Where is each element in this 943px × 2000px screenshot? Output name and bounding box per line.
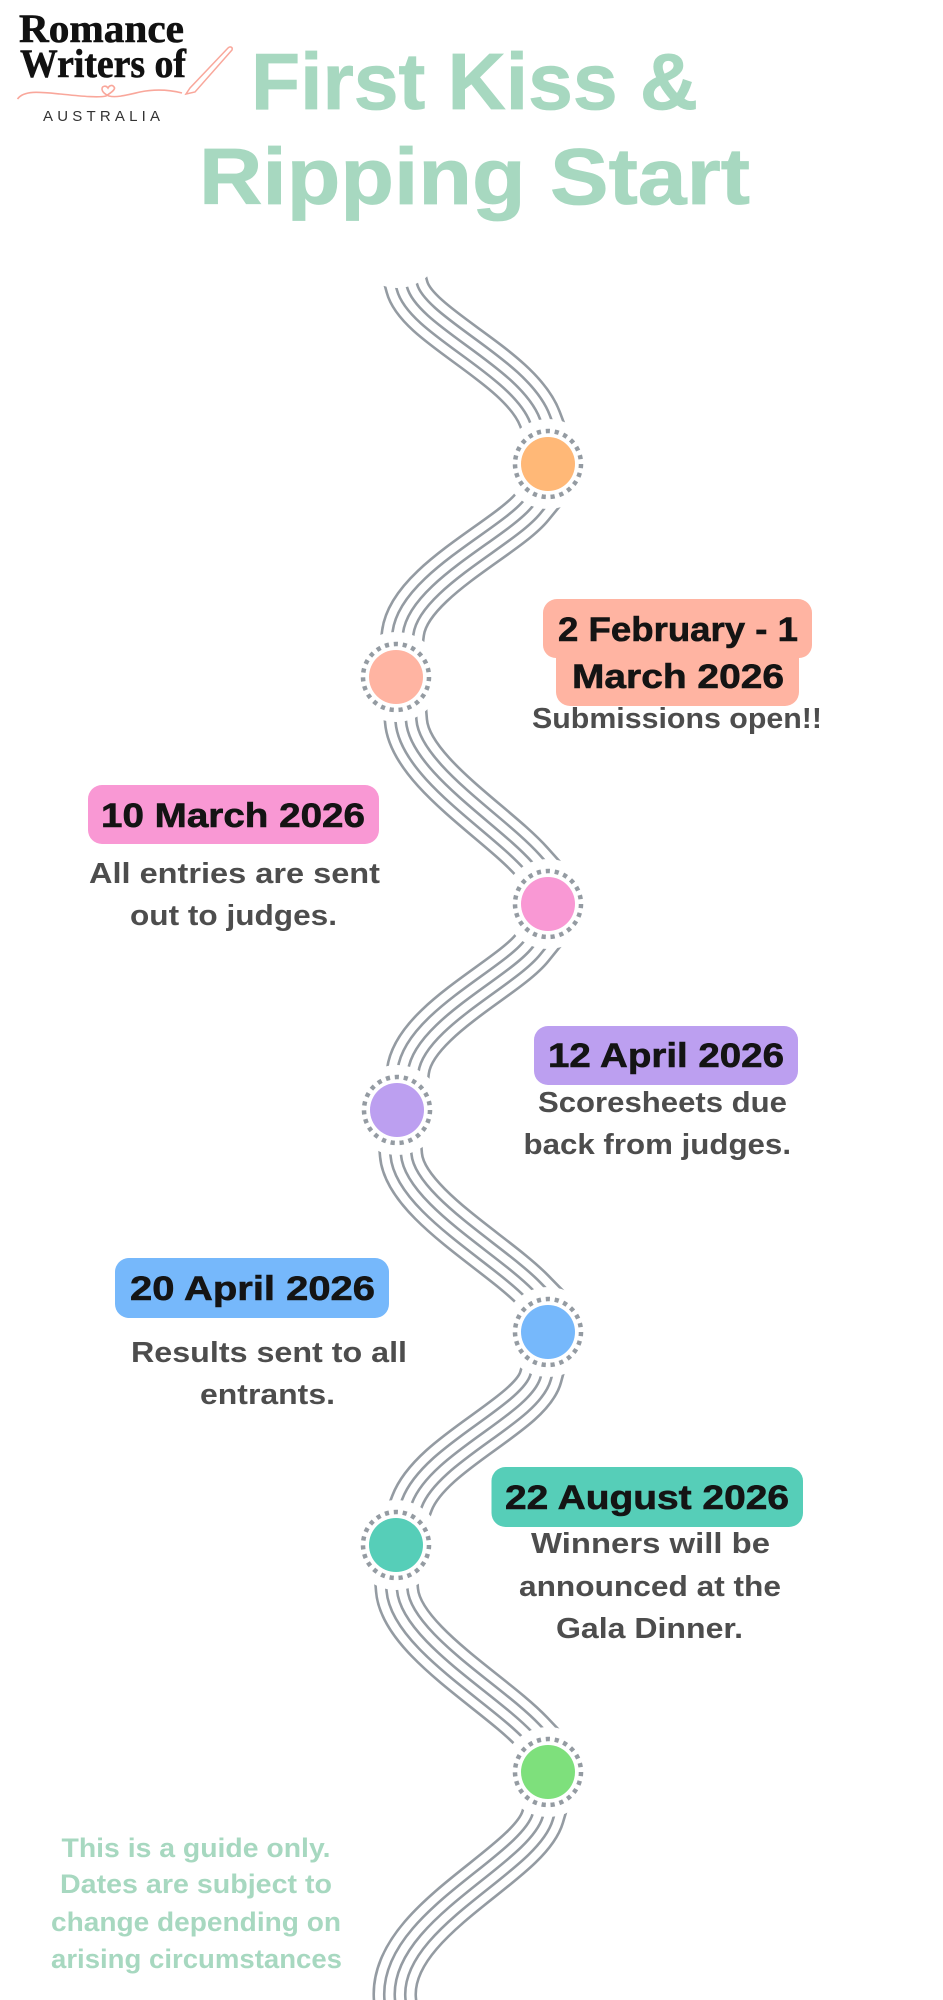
milestone: results sent: Results sent to all (131, 1337, 407, 1369)
milestone: submissions open: March 2026 (572, 658, 784, 696)
title: First Kiss & (251, 37, 698, 126)
milestone: winners announced: Winners will be (531, 1528, 770, 1560)
milestone: scoresheets due (524, 1026, 798, 1161)
logo: Romance Writers of Australia: Romance (19, 6, 184, 51)
milestone: winners announced: announced at the (519, 1571, 781, 1603)
milestone: scoresheets due: back from judges. (524, 1129, 791, 1161)
milestone: submissions open: Submissions open!! (532, 703, 822, 735)
milestone: winners announced: Gala Dinner. (556, 1613, 743, 1645)
footnote: This is a guide only. (62, 1833, 330, 1863)
milestone: results sent: entrants. (200, 1379, 335, 1411)
milestone: entries sent to judges: All entries are sent (89, 858, 380, 890)
node 6: teal (351, 1500, 441, 1590)
node 2: salmon (351, 632, 441, 722)
logo: Romance Writers of Australia: AUSTRALIA (43, 108, 160, 125)
timeline connector lines (352, 198, 554, 2000)
title: Ripping Start (199, 132, 750, 221)
milestone: winners announced: 22 August 2026 (505, 1479, 789, 1517)
milestone: submissions open (532, 599, 822, 735)
milestone: scoresheets due: 12 April 2026 (548, 1037, 784, 1075)
footnote: Dates are subject to (60, 1869, 332, 1899)
title (199, 37, 750, 221)
logo: Romance Writers of Australia: Writers of (20, 41, 187, 86)
milestone: results sent: 20 April 2026 (130, 1270, 375, 1308)
node 4: purple (352, 1065, 442, 1155)
milestone: submissions open: 2 February - 1 (558, 611, 798, 649)
footnote: change depending on (51, 1907, 341, 1937)
milestone: scoresheets due: Scoresheets due (538, 1087, 787, 1119)
footnote: arising circumstances (51, 1944, 342, 1974)
milestone: entries sent to judges (88, 785, 380, 932)
logo: Romance Writers of Australia (18, 6, 232, 125)
node 7: green (503, 1727, 593, 1817)
milestone: entries sent to judges: out to judges. (130, 900, 337, 932)
footnote (51, 1833, 342, 1974)
milestone: entries sent to judges: 10 March 2026 (101, 797, 365, 835)
node 5: blue (503, 1287, 593, 1377)
node 1: orange (503, 419, 593, 509)
milestone: winners announced (492, 1467, 803, 1645)
node 3: pink (503, 859, 593, 949)
milestone: results sent (115, 1258, 407, 1411)
